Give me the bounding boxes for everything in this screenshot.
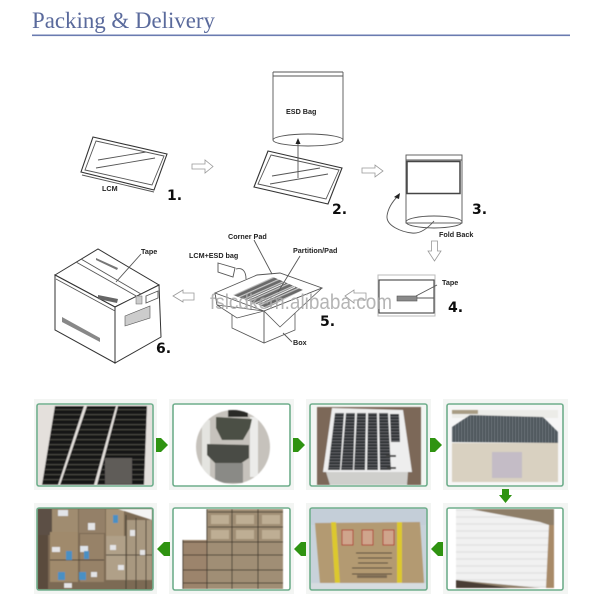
step 5: open box with contents: Corner Pad (228, 232, 267, 241)
step 1: LCM (81, 137, 182, 204)
step 2: ESD bag over LCM: ESD Bag (286, 107, 316, 116)
step 3: fold back (387, 155, 487, 239)
step 2: ESD bag over LCM (254, 72, 347, 218)
step 4: tape: 4. (448, 300, 463, 316)
arrow: photo 7 to 8 (157, 542, 170, 556)
arrow: photo 6 to 7 (294, 542, 306, 556)
arrow: photo 4 down to 5 (499, 489, 512, 503)
photo 7: stacked cartons (169, 503, 294, 594)
photo 8: warehouse cartons (34, 503, 157, 594)
step 5: open box with contents: LCM+ESD bag (189, 251, 238, 260)
step 5: open box with contents (189, 232, 337, 347)
step 4: tape: Tape (442, 278, 458, 287)
photo 6: strapped carton (306, 503, 431, 594)
arrow: step 5 to 6 (173, 290, 194, 302)
photo 5: foam sheet (443, 503, 568, 594)
step 6: sealed box: 6. (156, 341, 171, 357)
title: Packing & Delivery (32, 8, 215, 34)
step 1: LCM: 1. (167, 188, 182, 204)
step 1: LCM: LCM (102, 184, 118, 193)
arrow: photo 2 to 3 (293, 438, 305, 452)
photo 3: tray of modules (306, 399, 431, 490)
arrow: step 4 to 5 (345, 290, 366, 303)
arrow: step 3 to 4 (428, 241, 441, 261)
step 3: fold back: Fold Back (439, 230, 473, 239)
step 5: open box with contents: Box (293, 338, 307, 347)
arrow: photo 3 to 4 (430, 438, 442, 452)
arrow: photo 5 to 6 (431, 542, 443, 556)
step 5: open box with contents: Partition/Pad (293, 246, 337, 255)
photo 1: LCM combs (34, 399, 157, 490)
step 3: fold back: 3. (472, 202, 487, 218)
step 4: tape (378, 275, 463, 316)
arrow: photo 1 to 2 (156, 438, 168, 452)
photo 2: close-up circle (169, 399, 294, 490)
arrow: step 2 to 3 (362, 165, 383, 177)
step 2: ESD bag over LCM: 2. (332, 202, 347, 218)
watermark: fslcdkem.alibaba.com (210, 291, 392, 314)
arrow: step 1 to 2 (192, 160, 213, 173)
title rule (32, 34, 570, 36)
step 6: sealed box: Tape (141, 247, 157, 256)
step 5: open box with contents: 5. (320, 314, 335, 330)
photo 4: filled tray with label (443, 399, 568, 490)
step 6: sealed box (55, 247, 171, 363)
